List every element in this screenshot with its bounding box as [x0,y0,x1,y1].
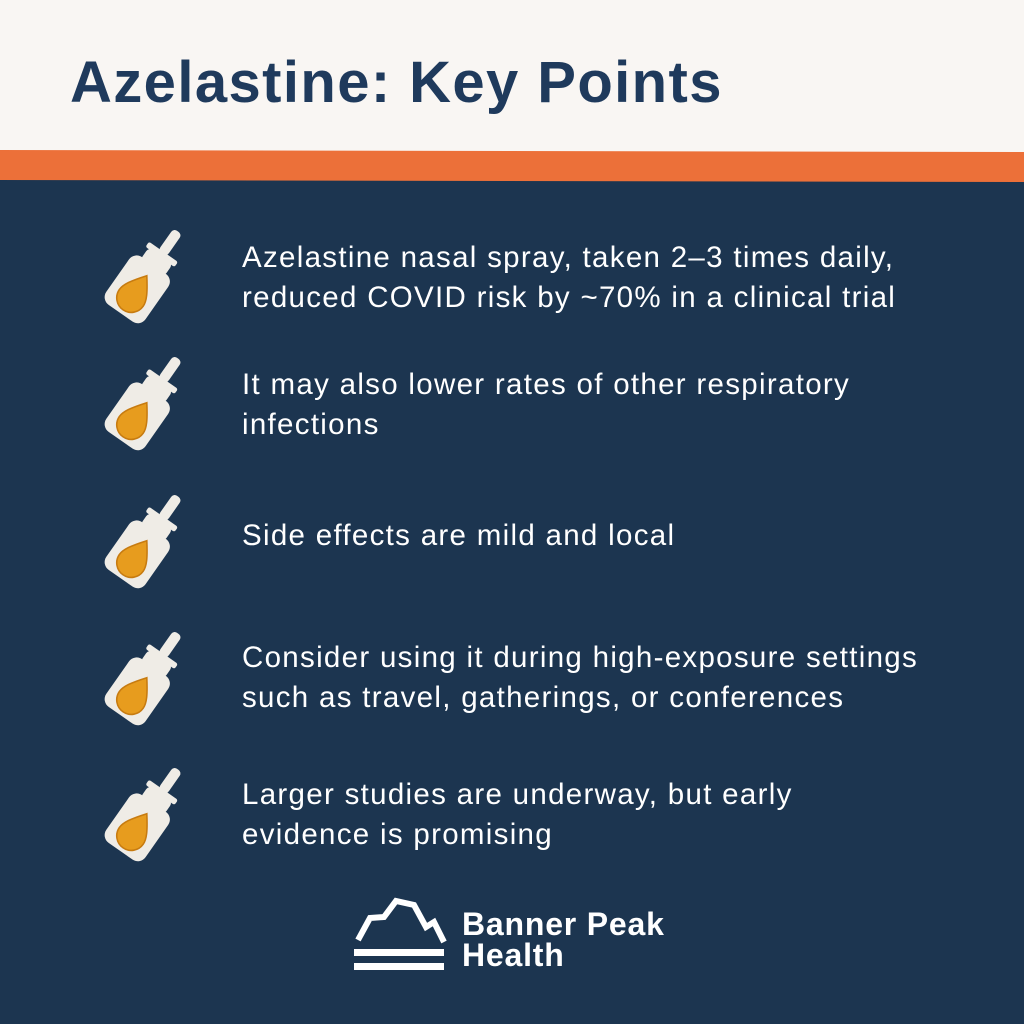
icon: nasal spray [104,495,180,588]
icon: nasal spray [104,768,180,862]
text: Side effects are mild and local [242,519,675,552]
logo text: Banner Peak [462,906,665,942]
item 5 [104,768,793,862]
text [242,368,850,441]
text: Consider using it during high-exposure settings [242,641,918,674]
text [242,778,793,851]
logo mark [354,898,447,970]
item 4 [104,632,918,726]
logo text: Health [462,937,565,973]
icon: nasal spray [104,632,180,726]
text: It may also lower rates of other respiratory [242,368,850,401]
item 2 [104,357,850,450]
header band [0,0,1024,152]
icon: nasal spray [104,357,180,450]
logo text [462,906,665,973]
text: such as travel, gatherings, or conferences [242,681,844,714]
text: evidence is promising [242,818,553,851]
text [242,241,896,314]
title: Azelastine: Key Points [70,50,723,115]
text [242,641,918,714]
text: reduced COVID risk by ~70% in a clinical trial [242,281,896,314]
item 1 [104,230,896,324]
logo [354,898,665,973]
text: infections [242,408,380,441]
item 3 [104,495,675,588]
text: Larger studies are underway, but early [242,778,793,811]
icon: nasal spray [104,230,180,324]
text: Azelastine nasal spray, taken 2–3 times daily, [242,241,894,274]
orange stripe [0,150,1024,182]
